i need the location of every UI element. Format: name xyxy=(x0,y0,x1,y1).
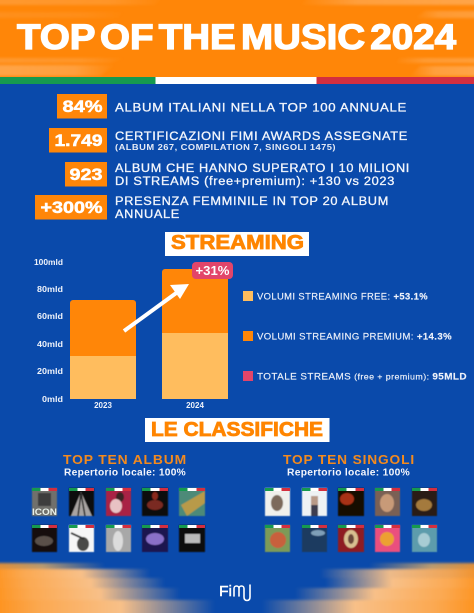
stat: 1.749 xyxy=(49,128,408,152)
stat: 84%: 84% xyxy=(62,98,103,116)
legend: VOLUMI STREAMING PREMIUM: +14.3% xyxy=(257,332,452,342)
legend: VOLUMI STREAMING FREE: +53.1% xyxy=(257,292,428,302)
italian flag stripe xyxy=(0,77,474,84)
stat: 1.749: (ALBUM 267, COMPILATION 7, SINGOLI 1475) xyxy=(115,143,336,152)
stat: 923: 923 xyxy=(70,166,102,184)
header band xyxy=(0,0,474,78)
stat: 923: DI STREAMS (free+premium): +130 vs 2023 xyxy=(115,176,395,188)
stat: +300%: ANNUALE xyxy=(115,209,180,221)
heading: top ten album: Repertorio locale: 100% xyxy=(64,466,186,478)
heading: le classifiche: LE CLASSIFICHE xyxy=(151,419,323,441)
stat: 1.749: CERTIFICAZIONI FIMI AWARDS ASSEGNATE xyxy=(115,131,408,143)
singles covers grid xyxy=(265,488,437,552)
stacked bar chart: 100mld xyxy=(34,258,63,267)
title: TOP OF THE MUSIC 2024 xyxy=(17,18,457,57)
heading: streaming: STREAMING xyxy=(171,232,304,254)
footer band: left streaks xyxy=(0,563,215,613)
legend: TOTALE STREAMS (free + premium): 95MLD xyxy=(257,372,467,382)
stacked bar chart: 2023 xyxy=(94,401,112,410)
ICON cover label: ICON xyxy=(32,507,57,517)
stat: +300% xyxy=(35,195,389,221)
arrow: growth xyxy=(124,284,189,331)
flags on album covers xyxy=(32,488,205,528)
legend xyxy=(243,291,467,382)
stat: 84%: ALBUM ITALIANI NELLA TOP 100 ANNUALE xyxy=(115,102,407,114)
heading: top ten album: TOP TEN ALBUM xyxy=(63,452,187,467)
stat: 84% xyxy=(57,94,407,118)
logo: fimi xyxy=(219,583,250,600)
stacked bar chart: 80mld xyxy=(37,285,63,294)
badge: +31%: +31% xyxy=(196,264,230,278)
footer band: right streaks xyxy=(262,563,474,613)
stat: +300%: +300% xyxy=(40,199,103,217)
flags on singles covers xyxy=(265,488,437,528)
stacked bar chart xyxy=(34,258,228,410)
stat: 923: ALBUM CHE HANNO SUPERATO I 10 MILIONI xyxy=(115,163,410,175)
stacked bar chart: 40mld xyxy=(37,340,63,349)
stat: 923 xyxy=(65,162,410,188)
album covers grid xyxy=(32,488,205,552)
stacked bar chart: 0mld xyxy=(42,395,63,404)
stacked bar chart: 60mld xyxy=(37,312,63,321)
heading: top ten singoli: Repertorio locale: 100% xyxy=(287,466,410,478)
stacked bar chart: 20mld xyxy=(37,367,63,376)
badge: +31% xyxy=(192,262,233,279)
heading: top ten singoli xyxy=(283,452,415,478)
heading: top ten singoli: TOP TEN SINGOLI xyxy=(283,452,415,467)
stacked bar chart: 2024 xyxy=(186,401,204,410)
heading: top ten album xyxy=(63,452,187,478)
logo: fimi: Fi xyxy=(219,583,232,600)
stat: +300%: PRESENZA FEMMINILE IN TOP 20 ALBUM xyxy=(115,196,389,208)
stat: 1.749: 1.749 xyxy=(54,132,102,150)
